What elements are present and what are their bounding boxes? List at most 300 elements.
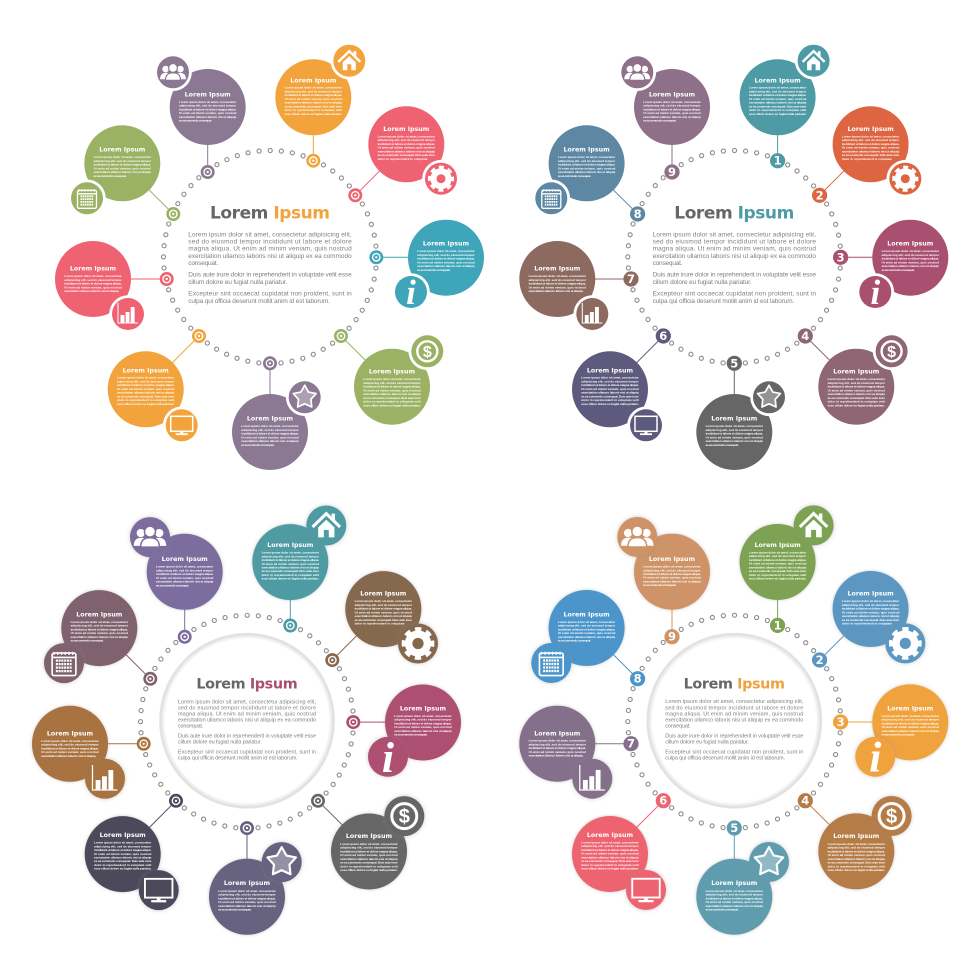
bubble 2: Lorem Ipsum bbox=[360, 591, 407, 598]
bubble 2: adipisicing elit, sed do eiusmod tempor bbox=[378, 138, 436, 142]
step 5 bbox=[696, 356, 788, 470]
icon: monitor bbox=[627, 406, 665, 444]
step 4 bbox=[311, 794, 424, 890]
bubble 6: Ut enim ad minim veniam, quis nostrud bbox=[94, 852, 152, 856]
bubble 8: ex ea commodo consequat. bbox=[558, 174, 591, 178]
bubble 5: Ut enim ad minim veniam, quis nostrud bbox=[706, 435, 763, 439]
bubble 8 bbox=[61, 590, 137, 666]
bubble 2: dolor in reprehenderit in voluptate bbox=[842, 622, 892, 626]
bubble 9: exercitation ullamco laboris nisi ut aliquip bbox=[156, 580, 214, 584]
description text: consequat. bbox=[653, 260, 683, 267]
step 2 bbox=[325, 571, 438, 667]
bubble 2: dolor in reprehenderit in voluptate bbox=[842, 157, 892, 161]
bubble 2: exercitation ullamco laboris nisi ut aliquip bbox=[355, 614, 412, 618]
step 8 bbox=[532, 125, 645, 222]
icon: monitor bbox=[626, 870, 666, 910]
bubble 7: Lorem ipsum dolor sit amet, consectetur bbox=[529, 739, 587, 743]
description text: cillum dolore eu fugiat nulla pariatur. bbox=[188, 279, 287, 286]
bubble 3: exercitation ullamco laboris nisi ut aliquip bbox=[417, 264, 475, 268]
bubble 6 bbox=[572, 816, 648, 892]
bubble 3: Lorem ipsum dolor sit amet, consectetur bbox=[417, 249, 476, 253]
step 9 bbox=[617, 517, 710, 644]
bubble 9 bbox=[147, 534, 223, 610]
icon: people bbox=[154, 54, 192, 91]
bubble 5 bbox=[696, 394, 772, 470]
bubble 6: exercitation ullamco laboris nisi ut aliquip bbox=[94, 855, 152, 859]
bubble 8: adipisicing elit, sed do eiusmod tempor bbox=[558, 159, 616, 163]
bubble 6: Lorem ipsum dolor sit amet, consectetur bbox=[94, 840, 152, 844]
bubble 3: adipisicing elit, sed do eiusmod tempor bbox=[882, 718, 940, 722]
bubble 1: dolor in reprehenderit in voluptate velit bbox=[749, 108, 806, 112]
bubble 1: ex ea commodo consequat. Duis aute irure bbox=[262, 569, 319, 573]
step 3: 3 bbox=[837, 250, 845, 264]
bubble 9: Ut enim ad minim veniam, quis nostrud bbox=[156, 576, 214, 580]
icon: monitor bbox=[163, 406, 200, 444]
bubble 6: exercitation ullamco laboris nisi ut aliquip bbox=[581, 391, 639, 395]
step 6 bbox=[572, 793, 671, 910]
bubble 9: incididunt ut labore et dolore magna aliqua. bbox=[156, 572, 214, 576]
bubble 4: Lorem ipsum dolor sit amet, consectetur bbox=[340, 842, 399, 846]
bubble 4: adipisicing elit, sed do eiusmod tempor bbox=[363, 381, 422, 385]
icon: people bbox=[617, 517, 657, 557]
bubble 9: Ut enim ad minim veniam, quis nostrud bbox=[643, 576, 701, 580]
bubble 6: Lorem Ipsum bbox=[587, 832, 633, 839]
bubble 1: Lorem ipsum dolor sit amet, consectetur bbox=[285, 86, 343, 90]
step 2 bbox=[812, 106, 924, 203]
bubble 6: ex ea commodo consequat. Duis aute irure bbox=[117, 394, 175, 398]
bubble 5: exercitation ullamco laboris nisi ut aliquip bbox=[218, 904, 276, 908]
bubble 1: incididunt ut labore et dolore magna aliqua. bbox=[262, 558, 319, 562]
step 7 bbox=[55, 241, 174, 333]
bubble 5: Lorem Ipsum bbox=[247, 415, 293, 422]
bubble 6: ex ea commodo consequat. Duis aute irure bbox=[94, 859, 152, 863]
bubble 6: exercitation ullamco laboris nisi ut aliquip bbox=[117, 391, 175, 395]
bubble 5: ex ea commodo consequat. bbox=[706, 908, 739, 912]
bubble 8: exercitation ullamco laboris nisi ut aliquip bbox=[558, 170, 615, 174]
bubble 2: Lorem ipsum dolor sit amet, consectetur bbox=[378, 134, 436, 138]
bubble 4: Ut enim ad minim veniam, quis nostrud bbox=[828, 388, 885, 392]
step 7 bbox=[32, 706, 151, 799]
bubble 6: ex ea commodo consequat. Duis aute irure bbox=[581, 859, 639, 863]
bubble 4 bbox=[331, 814, 407, 890]
step 6 bbox=[108, 329, 206, 444]
bubble 4 bbox=[818, 349, 894, 425]
panel: bottom-left diagram bbox=[32, 506, 461, 935]
bubble 8: Ut enim ad minim veniam, quis nostrud bbox=[558, 166, 615, 170]
step 5 bbox=[209, 821, 302, 935]
bubble 5: Lorem ipsum dolor sit amet, consectetur bbox=[706, 424, 764, 428]
description text bbox=[653, 231, 816, 305]
icon: star bbox=[286, 378, 324, 416]
bubble 7 bbox=[519, 706, 595, 782]
bubble 1: Lorem ipsum dolor sit amet, consectetur bbox=[749, 550, 807, 554]
bubble 9 bbox=[634, 69, 710, 145]
step 4: 4 bbox=[801, 794, 809, 808]
bubble 7: Lorem ipsum dolor sit amet, consectetur bbox=[529, 274, 587, 278]
bubble 3: exercitation ullamco laboris nisi ut aliquip bbox=[882, 264, 939, 268]
bubble 7: incididunt ut labore et dolore magna aliqua. bbox=[529, 282, 586, 286]
description text: Excepteur sint occaecat cupidatat non proident, sunt in bbox=[665, 749, 803, 755]
bubble 8: incididunt ut labore et dolore magna aliqua. bbox=[558, 627, 615, 631]
description text: sed do eiusmod tempor incididunt ut labore et dolore bbox=[665, 705, 803, 711]
bubble 2: exercitation ullamco laboris nisi ut aliquip bbox=[378, 149, 435, 153]
description text: Duis aute irure dolor in reprehenderit in voluptate velit esse bbox=[178, 733, 316, 739]
bubble 7: adipisicing elit, sed do eiusmod tempor bbox=[64, 278, 123, 282]
step 1 bbox=[252, 506, 346, 632]
bubble 4: dolor in reprehenderit in voluptate velit bbox=[340, 864, 398, 868]
bubble 2: ex ea commodo consequat. Duis aute irure bbox=[842, 618, 900, 622]
step 8: 8 bbox=[634, 672, 642, 686]
bubble 1: exercitation ullamco laboris nisi ut aliquip bbox=[749, 565, 806, 569]
bubble 7: Ut enim ad minim veniam, quis nostrud bbox=[64, 285, 122, 289]
description text bbox=[178, 699, 317, 762]
bubble 9: exercitation ullamco laboris nisi ut aliquip bbox=[643, 115, 701, 119]
bubble 1: Lorem ipsum dolor sit amet, consectetur bbox=[749, 86, 807, 90]
description text: exercitation ullamco laboris nisi ut aliquip ex ea commodo bbox=[178, 718, 316, 724]
step 2 bbox=[348, 106, 460, 202]
bubble 3: Ut enim ad minim veniam, quis nostrud bbox=[882, 725, 939, 729]
bubble 3: Ut enim ad minim veniam, quis nostrud bbox=[417, 260, 475, 264]
bubble 1: dolor in reprehenderit in voluptate velit bbox=[262, 573, 319, 577]
bubble 5 bbox=[232, 394, 308, 470]
description text: cillum dolore eu fugiat nulla pariatur. bbox=[665, 740, 749, 746]
bubble 2: adipisicing elit, sed do eiusmod tempor bbox=[842, 138, 900, 142]
bubble 1: Lorem Ipsum bbox=[755, 542, 801, 549]
bubble 5: incididunt ut labore et dolore magna aliqua. bbox=[218, 896, 276, 900]
bubble 6: adipisicing elit, sed do eiusmod tempor bbox=[94, 844, 152, 848]
bubble 7: Lorem ipsum dolor sit amet, consectetur bbox=[41, 739, 100, 743]
bubble 6: incididunt ut labore et dolore magna aliqua. bbox=[94, 848, 152, 852]
description text: sed do eiusmod tempor incididunt ut labore et dolore bbox=[188, 239, 352, 246]
icon: gear bbox=[886, 160, 924, 198]
description text: sed do eiusmod tempor incididunt ut labore et dolore bbox=[178, 706, 316, 712]
description text: Excepteur sint occaecat cupidatat non proident, sunt in bbox=[653, 291, 816, 298]
bubble 3: Ut enim ad minim veniam, quis nostrud bbox=[394, 725, 452, 729]
bubble 4: Ut enim ad minim veniam, quis nostrud bbox=[363, 388, 421, 392]
bubble 2: incididunt ut labore et dolore magna aliqua. bbox=[355, 607, 412, 611]
bubble 6: adipisicing elit, sed do eiusmod tempor bbox=[117, 379, 175, 383]
bubble 8: Lorem Ipsum bbox=[99, 147, 146, 154]
bubble 6: Lorem ipsum dolor sit amet, consectetur bbox=[117, 376, 175, 380]
bubble 2: Lorem ipsum dolor sit amet, consectetur bbox=[842, 599, 900, 603]
description text: magna aliqua. Ut enim ad minim veniam, quis nostrud bbox=[178, 711, 316, 717]
bubble 5: Lorem ipsum dolor sit amet, consectetur bbox=[706, 889, 764, 893]
bubble 2: dolor in reprehenderit in voluptate bbox=[355, 622, 405, 626]
bubble 3: incididunt ut labore et dolore magna aliqua. bbox=[882, 721, 939, 725]
icon: calendar bbox=[531, 643, 571, 683]
bubble 8: Lorem Ipsum bbox=[76, 611, 123, 618]
bubble 5: Ut enim ad minim veniam, quis nostrud bbox=[706, 900, 763, 904]
bubble 8: ex ea commodo consequat. bbox=[558, 639, 591, 643]
bubble 5: adipisicing elit, sed do eiusmod tempor bbox=[706, 428, 764, 432]
icon: calendar bbox=[68, 180, 106, 217]
bubble 1: esse cillum dolore eu fugiat nulla pariatur. bbox=[749, 112, 807, 116]
bubble 9: Lorem Ipsum bbox=[649, 91, 695, 98]
heading: Lorem Ipsum bbox=[674, 204, 794, 224]
bubble 4: Lorem Ipsum bbox=[833, 368, 880, 375]
bubble 8: adipisicing elit, sed do eiusmod tempor bbox=[558, 624, 616, 628]
bubble 9: adipisicing elit, sed do eiusmod tempor bbox=[179, 104, 237, 108]
bubble 1: dolor in reprehenderit in voluptate velit bbox=[749, 573, 806, 577]
bubble 1: ex ea commodo consequat. Duis aute irure bbox=[749, 104, 807, 108]
bubble 2: adipisicing elit, sed do eiusmod tempor bbox=[842, 603, 900, 607]
bubble 1 bbox=[740, 524, 816, 600]
bubble 5: adipisicing elit, sed do eiusmod tempor bbox=[218, 893, 277, 897]
bubble 2: Ut enim ad minim veniam, quis nostrud bbox=[842, 146, 899, 150]
bubble 9: adipisicing elit, sed do eiusmod tempor bbox=[156, 568, 214, 572]
bubble 3 bbox=[872, 220, 948, 296]
step 7 bbox=[519, 706, 639, 799]
dotted ring bbox=[140, 615, 354, 828]
bubble 8: ex ea commodo consequat. bbox=[71, 639, 104, 643]
bubble 7: Ut enim ad minim veniam, quis nostrud bbox=[41, 750, 99, 754]
bubble 7: Lorem Ipsum bbox=[70, 266, 116, 273]
bubble 6: esse cillum dolore eu fugiat nulla pariatur. bbox=[581, 402, 639, 406]
description text bbox=[188, 231, 352, 305]
icon: calendar bbox=[532, 180, 570, 217]
bubble 6 bbox=[85, 816, 161, 892]
icon: info: i bbox=[869, 734, 881, 782]
bubble 6: dolor in reprehenderit in voluptate velit bbox=[581, 863, 639, 867]
bubble 2: ex ea commodo consequat. Duis aute irure bbox=[842, 153, 900, 157]
panel: top-right diagram bbox=[519, 42, 948, 470]
bubble 4: adipisicing elit, sed do eiusmod tempor bbox=[828, 381, 886, 385]
step 3 bbox=[833, 684, 948, 782]
bubble 9: Lorem ipsum dolor sit amet, consectetur bbox=[643, 565, 702, 569]
bubble 3: adipisicing elit, sed do eiusmod tempor bbox=[882, 253, 940, 257]
step 2: 2 bbox=[816, 188, 824, 202]
bubble 1: Ut enim ad minim veniam, quis nostrud bbox=[749, 97, 806, 101]
description text: Duis aute irure dolor in reprehenderit in voluptate velit esse bbox=[665, 733, 803, 739]
bubble 4: dolor in reprehenderit in voluptate velit bbox=[828, 400, 885, 404]
bubble 8 bbox=[549, 125, 625, 201]
bubble 1: exercitation ullamco laboris nisi ut aliquip bbox=[749, 101, 806, 105]
step 9: 9 bbox=[668, 630, 676, 644]
bubble 6: adipisicing elit, sed do eiusmod tempor bbox=[581, 844, 640, 848]
bubble 6: Lorem ipsum dolor sit amet, consectetur bbox=[581, 376, 640, 380]
icon: home bbox=[330, 42, 368, 80]
bubble 8: adipisicing elit, sed do eiusmod tempor bbox=[71, 624, 129, 628]
description text bbox=[665, 699, 804, 762]
bubble 1 bbox=[740, 59, 816, 135]
bubble 3: Lorem ipsum dolor sit amet, consectetur bbox=[882, 249, 940, 253]
bubble 7 bbox=[55, 241, 131, 317]
step 4 bbox=[334, 329, 446, 425]
bubble 5: exercitation ullamco laboris nisi ut aliquip bbox=[706, 439, 763, 443]
bubble 7: Lorem Ipsum bbox=[534, 730, 581, 737]
step 3 bbox=[833, 220, 948, 312]
bubble 7: incididunt ut labore et dolore magna aliqua. bbox=[64, 282, 122, 286]
step 9: 9 bbox=[668, 165, 676, 179]
bubble 4 bbox=[354, 349, 430, 425]
bubble 9: Ut enim ad minim veniam, quis nostrud bbox=[643, 111, 701, 115]
step 6 bbox=[85, 794, 183, 910]
step 5: 5 bbox=[730, 356, 738, 370]
description text: Excepteur sint occaecat cupidatat non proident, sunt in bbox=[178, 750, 316, 756]
description text: Lorem ipsum dolor sit amet, consectetur adipisicing elit, bbox=[665, 699, 804, 705]
description text: Duis aute irure dolor in reprehenderit in voluptate velit esse bbox=[653, 272, 816, 279]
icon: home bbox=[306, 506, 346, 546]
bubble 4: esse cillum dolore eu fugiat nulla pariatur. bbox=[828, 403, 885, 407]
icon: star bbox=[750, 378, 788, 416]
bubble 3: incididunt ut labore et dolore magna aliqua. bbox=[882, 257, 939, 261]
bubble 2 bbox=[833, 571, 909, 647]
bubble 3 bbox=[872, 684, 948, 760]
bubble 3: ex ea commodo consequat. bbox=[394, 733, 427, 737]
icon: bar chart bbox=[574, 295, 611, 333]
bubble 8: Lorem ipsum dolor sit amet, consectetur bbox=[94, 155, 152, 159]
center circle bbox=[159, 633, 335, 809]
icon: star bbox=[749, 842, 789, 882]
bubble 3: Ut enim ad minim veniam, quis nostrud bbox=[882, 260, 939, 264]
description text: cillum dolore eu fugiat nulla pariatur. bbox=[178, 740, 262, 746]
bubble 1: adipisicing elit, sed do eiusmod tempor bbox=[262, 554, 320, 558]
step 1 bbox=[275, 42, 368, 168]
panel: bottom-right diagram bbox=[519, 505, 948, 935]
bubble 9: ex ea commodo consequat. bbox=[643, 583, 676, 587]
bubble 7 bbox=[519, 241, 595, 317]
description text: cillum dolore eu fugiat nulla pariatur. bbox=[653, 279, 752, 286]
bubble 9: exercitation ullamco laboris nisi ut aliquip bbox=[643, 580, 701, 584]
description text: magna aliqua. Ut enim ad minim veniam, quis nostrud bbox=[665, 711, 803, 717]
bubble 8: ex ea commodo consequat. bbox=[94, 174, 127, 178]
bubble 6: dolor in reprehenderit in voluptate velit bbox=[117, 398, 174, 402]
bubble 2: exercitation ullamco laboris nisi ut aliquip bbox=[842, 149, 899, 153]
bubble 4: dolor in reprehenderit in voluptate velit bbox=[828, 864, 885, 868]
bubble 4: Ut enim ad minim veniam, quis nostrud bbox=[828, 853, 885, 857]
bubble 8: Lorem ipsum dolor sit amet, consectetur bbox=[558, 620, 616, 624]
step 8: 8 bbox=[634, 207, 642, 221]
bubble 2 bbox=[368, 106, 444, 182]
bubble 4: Lorem Ipsum bbox=[369, 368, 415, 375]
bubble 4: exercitation ullamco laboris nisi ut aliquip bbox=[340, 857, 398, 861]
bubble 1: dolor in reprehenderit in voluptate velit bbox=[285, 108, 342, 112]
description text: culpa qui officia deserunt mollit anim id est laborum. bbox=[665, 756, 785, 762]
bubble 5: Lorem Ipsum bbox=[224, 880, 270, 887]
bubble 2: exercitation ullamco laboris nisi ut aliquip bbox=[842, 614, 899, 618]
bubble 6: Lorem Ipsum bbox=[100, 832, 146, 839]
step 5 bbox=[232, 356, 324, 470]
icon: gear bbox=[885, 623, 925, 663]
bubble 3: Lorem Ipsum bbox=[423, 241, 469, 248]
icon: dollar: $ bbox=[423, 344, 432, 361]
bubble 6: Lorem Ipsum bbox=[123, 367, 169, 374]
bubble 2: Lorem Ipsum bbox=[383, 126, 430, 133]
bubble 8: Lorem ipsum dolor sit amet, consectetur bbox=[71, 620, 129, 624]
bubble 8: Lorem Ipsum bbox=[564, 147, 610, 154]
bubble 6 bbox=[108, 351, 184, 427]
bubble 4: esse cillum dolore eu fugiat nulla pariatur. bbox=[363, 403, 421, 407]
bubble 2: Lorem Ipsum bbox=[848, 126, 894, 133]
bubble 9: Lorem Ipsum bbox=[162, 556, 208, 563]
bubble 1: Ut enim ad minim veniam, quis nostrud bbox=[749, 562, 806, 566]
bubble 2: Ut enim ad minim veniam, quis nostrud bbox=[842, 610, 899, 614]
bubble 7: incididunt ut labore et dolore magna aliqua. bbox=[41, 746, 99, 750]
bubble 8: adipisicing elit, sed do eiusmod tempor bbox=[94, 159, 152, 163]
icon: dollar: $ bbox=[887, 344, 896, 361]
bubble 5 bbox=[696, 859, 772, 935]
heading: Lorem Ipsum bbox=[684, 676, 785, 692]
bubble 8: Ut enim ad minim veniam, quis nostrud bbox=[71, 631, 128, 635]
bubble 3: Lorem Ipsum bbox=[887, 241, 934, 248]
bubble 9: Lorem Ipsum bbox=[649, 556, 695, 563]
description text: magna aliqua. Ut enim ad minim veniam, quis nostrud bbox=[188, 246, 352, 253]
bubble 4: ex ea commodo consequat. Duis aute irure bbox=[363, 396, 421, 400]
bubble 5: Lorem Ipsum bbox=[711, 880, 758, 887]
bubble 9: incididunt ut labore et dolore magna aliqua. bbox=[643, 107, 701, 111]
bubble 8: exercitation ullamco laboris nisi ut aliquip bbox=[558, 635, 615, 639]
bubble 3: ex ea commodo consequat. bbox=[882, 733, 915, 737]
bubble 6: esse cillum dolore eu fugiat nulla pariatur. bbox=[581, 867, 639, 871]
bubble 4: Ut enim ad minim veniam, quis nostrud bbox=[340, 853, 398, 857]
bubble 8: incididunt ut labore et dolore magna aliqua. bbox=[71, 627, 128, 631]
bubble 4: esse cillum dolore eu fugiat nulla pariatur. bbox=[340, 868, 398, 872]
bubble 4: ex ea commodo consequat. Duis aute irure bbox=[828, 396, 885, 400]
bubble 1: adipisicing elit, sed do eiusmod tempor bbox=[285, 89, 343, 93]
bubble 9 bbox=[634, 534, 710, 610]
step 2: 2 bbox=[816, 653, 824, 667]
bubble 3 bbox=[385, 684, 461, 760]
bubble 9: incididunt ut labore et dolore magna aliqua. bbox=[179, 107, 237, 111]
bubble 6: esse cillum dolore eu fugiat nulla pariatur. bbox=[117, 402, 175, 406]
bubble 2: Ut enim ad minim veniam, quis nostrud bbox=[355, 610, 412, 614]
bubble 9: Ut enim ad minim veniam, quis nostrud bbox=[179, 111, 237, 115]
description text: culpa qui officia deserunt mollit anim id est laborum. bbox=[178, 756, 298, 762]
step 6: 6 bbox=[659, 329, 667, 343]
bubble 6 bbox=[572, 351, 648, 427]
bubble 4: incididunt ut labore et dolore magna aliqua. bbox=[363, 385, 421, 389]
bubble 9: Lorem ipsum dolor sit amet, consectetur bbox=[179, 100, 237, 104]
bubble 7: Ut enim ad minim veniam, quis nostrud bbox=[529, 285, 586, 289]
description text: consequat. bbox=[188, 260, 218, 267]
bubble 1: incididunt ut labore et dolore magna aliqua. bbox=[285, 93, 342, 97]
description text: Lorem ipsum dolor sit amet, consectetur adipisicing elit, bbox=[653, 231, 816, 238]
bubble 4: incididunt ut labore et dolore magna aliqua. bbox=[828, 385, 885, 389]
bubble 8: exercitation ullamco laboris nisi ut aliquip bbox=[71, 635, 128, 639]
step 3: 3 bbox=[837, 715, 845, 729]
step 7: 7 bbox=[627, 737, 635, 751]
step 9 bbox=[130, 517, 223, 644]
bubble 3: exercitation ullamco laboris nisi ut aliquip bbox=[394, 729, 452, 733]
bubble 3: Lorem ipsum dolor sit amet, consectetur bbox=[882, 714, 940, 718]
bubble 5: ex ea commodo consequat. bbox=[706, 443, 739, 447]
bubble 7: incididunt ut labore et dolore magna aliqua. bbox=[529, 746, 586, 750]
bubble 4: Lorem Ipsum bbox=[833, 833, 880, 840]
bubble 5: adipisicing elit, sed do eiusmod tempor bbox=[241, 428, 300, 432]
bubble 3 bbox=[408, 220, 484, 296]
bubble 4: incididunt ut labore et dolore magna aliqua. bbox=[340, 849, 398, 853]
icon: gear bbox=[422, 160, 460, 198]
bubble 1: esse cillum dolore eu fugiat nulla pariatur. bbox=[285, 112, 342, 116]
description text: consequat. bbox=[178, 724, 204, 730]
step 9 bbox=[154, 54, 246, 179]
bubble 6: Lorem Ipsum bbox=[587, 367, 633, 374]
bubble 9: adipisicing elit, sed do eiusmod tempor bbox=[643, 104, 702, 108]
bubble 2: dolor in reprehenderit in voluptate bbox=[378, 157, 428, 161]
description text: Lorem ipsum dolor sit amet, consectetur adipisicing elit, bbox=[178, 699, 317, 705]
bubble 7: Lorem Ipsum bbox=[47, 730, 93, 737]
heading: Lorem Ipsum bbox=[196, 676, 298, 692]
bubble 4: Lorem ipsum dolor sit amet, consectetur bbox=[363, 377, 422, 381]
bubble 2: Lorem Ipsum bbox=[848, 591, 894, 598]
description text: exercitation ullamco laboris nisi ut aliquip ex ea commodo bbox=[188, 253, 352, 260]
bubble 4: dolor in reprehenderit in voluptate velit bbox=[363, 400, 421, 404]
bubble 5: ex ea commodo consequat. bbox=[218, 908, 251, 912]
bubble 8: incididunt ut labore et dolore magna aliqua. bbox=[558, 163, 615, 167]
description text: exercitation ullamco laboris nisi ut aliquip ex ea commodo bbox=[653, 253, 816, 260]
bubble 2: Ut enim ad minim veniam, quis nostrud bbox=[378, 146, 435, 150]
bubble 1: Lorem Ipsum bbox=[290, 77, 337, 84]
